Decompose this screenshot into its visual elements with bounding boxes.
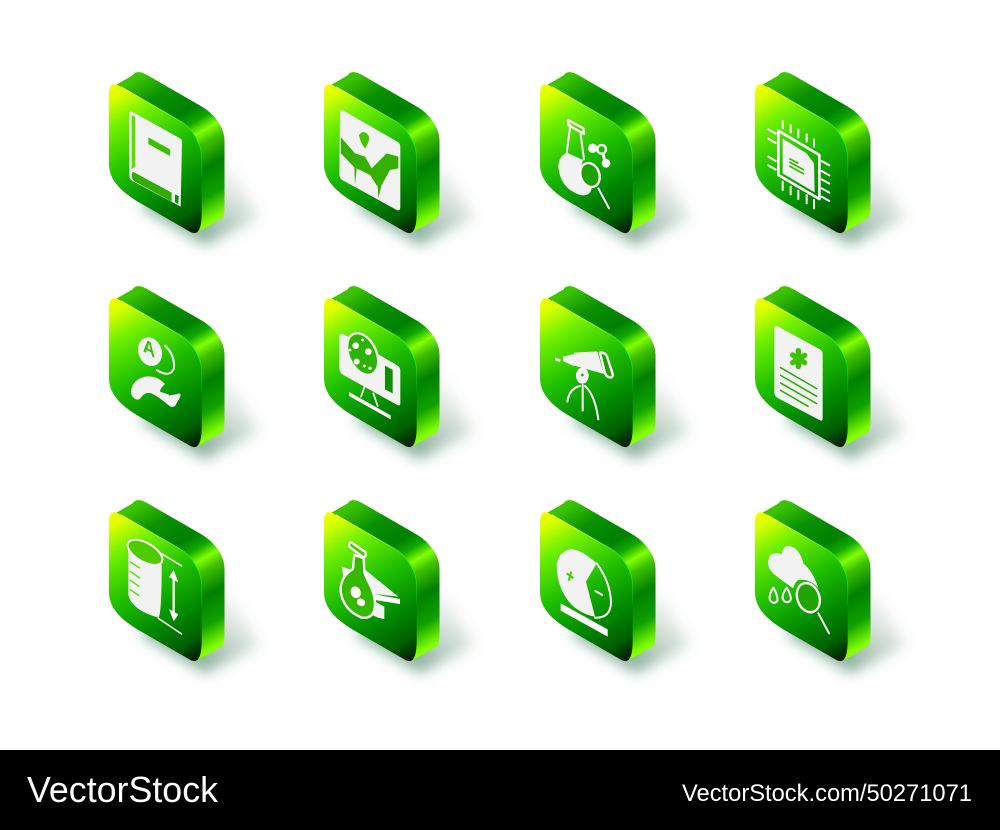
icon: flask with graduation cap — [341, 542, 400, 619]
tile: processor chip — [755, 53, 905, 252]
icon: document with asterisk — [774, 326, 823, 421]
icon: hand holding letter A — [131, 334, 181, 407]
icon: book — [129, 111, 182, 207]
tile: medical document — [755, 267, 905, 466]
tile: telescope — [540, 267, 690, 466]
tile: flask and graduation cap — [324, 481, 474, 680]
tile: cylinder height — [109, 481, 259, 680]
tile: rain with magnifier — [755, 481, 905, 680]
footer logo text: VectorStock — [27, 769, 219, 810]
icon: telescope on tripod — [555, 351, 613, 419]
footer band — [0, 750, 1000, 830]
tile: language letter in hand — [109, 267, 259, 466]
icon: board with moon — [339, 328, 400, 419]
tile: projector presentation — [324, 267, 474, 466]
icon: document chip — [768, 121, 829, 208]
icon: flask with molecule and magnifier — [558, 120, 610, 208]
icon: landscape map — [339, 110, 400, 210]
footer image id: VectorStock.com/50271071 — [682, 781, 972, 807]
tile: flask with magnifier — [540, 53, 690, 252]
icon: cylinder with height arrow — [124, 535, 182, 634]
icon: hand holding letter A: A — [143, 335, 155, 363]
icon: cloud, rain drops and magnifier — [768, 546, 829, 633]
tile: book — [109, 53, 259, 252]
tile: landscape map — [324, 53, 474, 252]
tile: gauge dial — [540, 481, 690, 680]
icon: plus minus gauge — [557, 549, 611, 637]
